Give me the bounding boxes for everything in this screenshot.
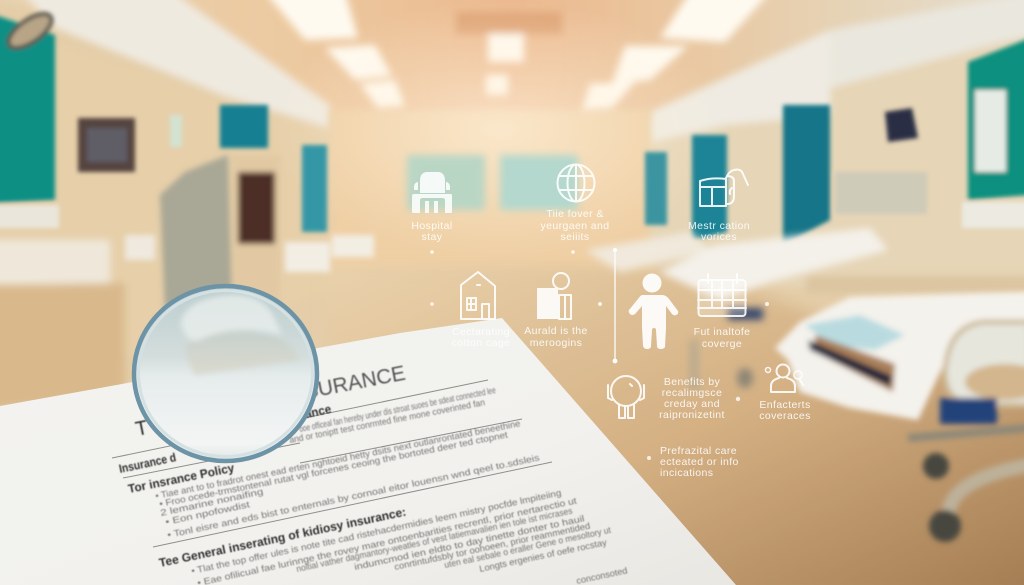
left wall — [0, 0, 335, 410]
icon: people — [766, 364, 803, 392]
label: prenatal care — [660, 445, 739, 479]
vertical connector — [613, 248, 617, 363]
document body text: noltial vather dagmantory-weatles of vest latiemavalien ien tole ist micrases — [295, 505, 574, 574]
label: prenatal care: Prefrazital care — [660, 445, 737, 457]
document body text: conrtintufdsbly tor oohoeen, prior reammentided — [393, 521, 591, 572]
icon: devices — [537, 273, 571, 319]
document body text: Insurance — [276, 402, 333, 427]
back-wall windows — [407, 155, 578, 210]
label: benefits: recalimgsce — [662, 387, 722, 399]
label: covering costs: Cectarating — [452, 326, 510, 338]
label: full coverage: Fut inaltofe — [694, 326, 750, 338]
marker dots — [430, 250, 769, 460]
icon: medication — [700, 170, 748, 206]
policy document — [0, 318, 736, 585]
label: full coverage: coverge — [702, 338, 742, 350]
document body text: indumcmod ien eldto to day tinette donter to hauil — [353, 513, 585, 572]
document body text: • Eon npofowdist — [164, 499, 251, 527]
document title: T — [134, 417, 150, 441]
label: enhanced coverages — [759, 399, 811, 422]
floor — [330, 268, 1024, 585]
document body text — [118, 385, 628, 585]
label: enhanced coverages: coveraces — [759, 410, 811, 422]
central warm glow — [270, 0, 730, 260]
document body text: uten eal sebale o eraller Gene o mesoltory ut — [443, 525, 612, 570]
label: benefits: creday and — [664, 398, 720, 410]
label: cover and benefits: Tiie fover & — [546, 208, 604, 220]
label: prenatal care: ecteated or info — [660, 456, 739, 468]
icon: figure in circle — [608, 376, 644, 418]
document body text: 2 lemarine nonaifing — [159, 486, 264, 518]
label: benefits — [659, 376, 725, 421]
label: margins — [524, 325, 588, 349]
ceiling lights — [265, 0, 770, 110]
label: enhanced coverages: Enfacterts — [759, 399, 811, 411]
label: cover and benefits — [540, 208, 610, 243]
document body text: Tor insrance Policy — [127, 461, 236, 496]
lens highlight — [181, 295, 282, 341]
icon: calendar — [698, 274, 746, 316]
document title, right part: INSURANCE — [282, 362, 407, 408]
document body text: and or toniptt test conrmted fine mone coverinted fan — [288, 397, 486, 445]
hospital beds — [585, 228, 1024, 390]
icon: hospital — [412, 172, 452, 213]
label: benefits: raipronizetint — [659, 409, 725, 421]
document body text: ooe officeal fan hereby under dis stroat suoes be sdeat connected lee — [298, 385, 497, 434]
label: covering costs: cotton cage — [452, 337, 510, 349]
label: margins: Aurald is the — [524, 325, 588, 337]
left wall furnishings — [0, 8, 327, 232]
document rules — [112, 380, 552, 547]
document body text: • Froo ocede-trmstontenal rutat vgl forcenes ceoing the bortoted deer ted ctopnet — [158, 429, 509, 509]
lens inner rim — [138, 290, 312, 456]
document body text: Insurance d — [118, 450, 177, 476]
document body text: • Tlat the top offer ules is note tite cad ristehacdermidies leem mistry pocfde lmpiteiing — [190, 488, 562, 576]
foreground bed — [775, 292, 1024, 542]
right wall — [645, 0, 1024, 300]
medical cabinet — [125, 155, 374, 310]
label: prenatal care: incications — [660, 467, 713, 479]
label: benefits: Benefits by — [664, 376, 721, 388]
label: hospital stay — [411, 220, 453, 243]
label: cover and benefits: seiiits — [560, 231, 590, 243]
document body text: Tee General inserating of kidiosy insurance: — [158, 505, 407, 570]
icon: patient — [629, 274, 678, 349]
ceiling — [0, 0, 1024, 118]
document body text: Longts ergenies of oefe rocstay — [478, 537, 608, 574]
label: medication services: Mestr cation — [688, 220, 750, 232]
label: full coverage — [694, 326, 750, 350]
back wall — [330, 110, 650, 270]
icon: house — [461, 272, 495, 319]
lens shadow band — [186, 328, 300, 375]
label: margins: meroogins — [530, 337, 582, 349]
label: cover and benefits: yeurgaen and — [540, 220, 610, 232]
right wall curtains and panels — [645, 38, 1024, 245]
label: covering costs — [452, 326, 510, 349]
label: medication services: vorices — [701, 231, 737, 243]
label: hospital stay: stay — [422, 231, 443, 243]
label: medication services — [688, 220, 750, 243]
document body text: • Tonl eisre and eds bist to enternals by cornoal eitor louensn wnd qeel to.sdsleis — [166, 452, 541, 540]
icon: globe — [558, 164, 594, 202]
document body text: • Tiae ant to to fradrot onest ead erten nghtoeid hetty dsits next outlanrontated beneethine — [154, 418, 521, 501]
label: hospital stay: Hospital — [411, 220, 453, 232]
magnifying glass lens — [134, 286, 317, 461]
